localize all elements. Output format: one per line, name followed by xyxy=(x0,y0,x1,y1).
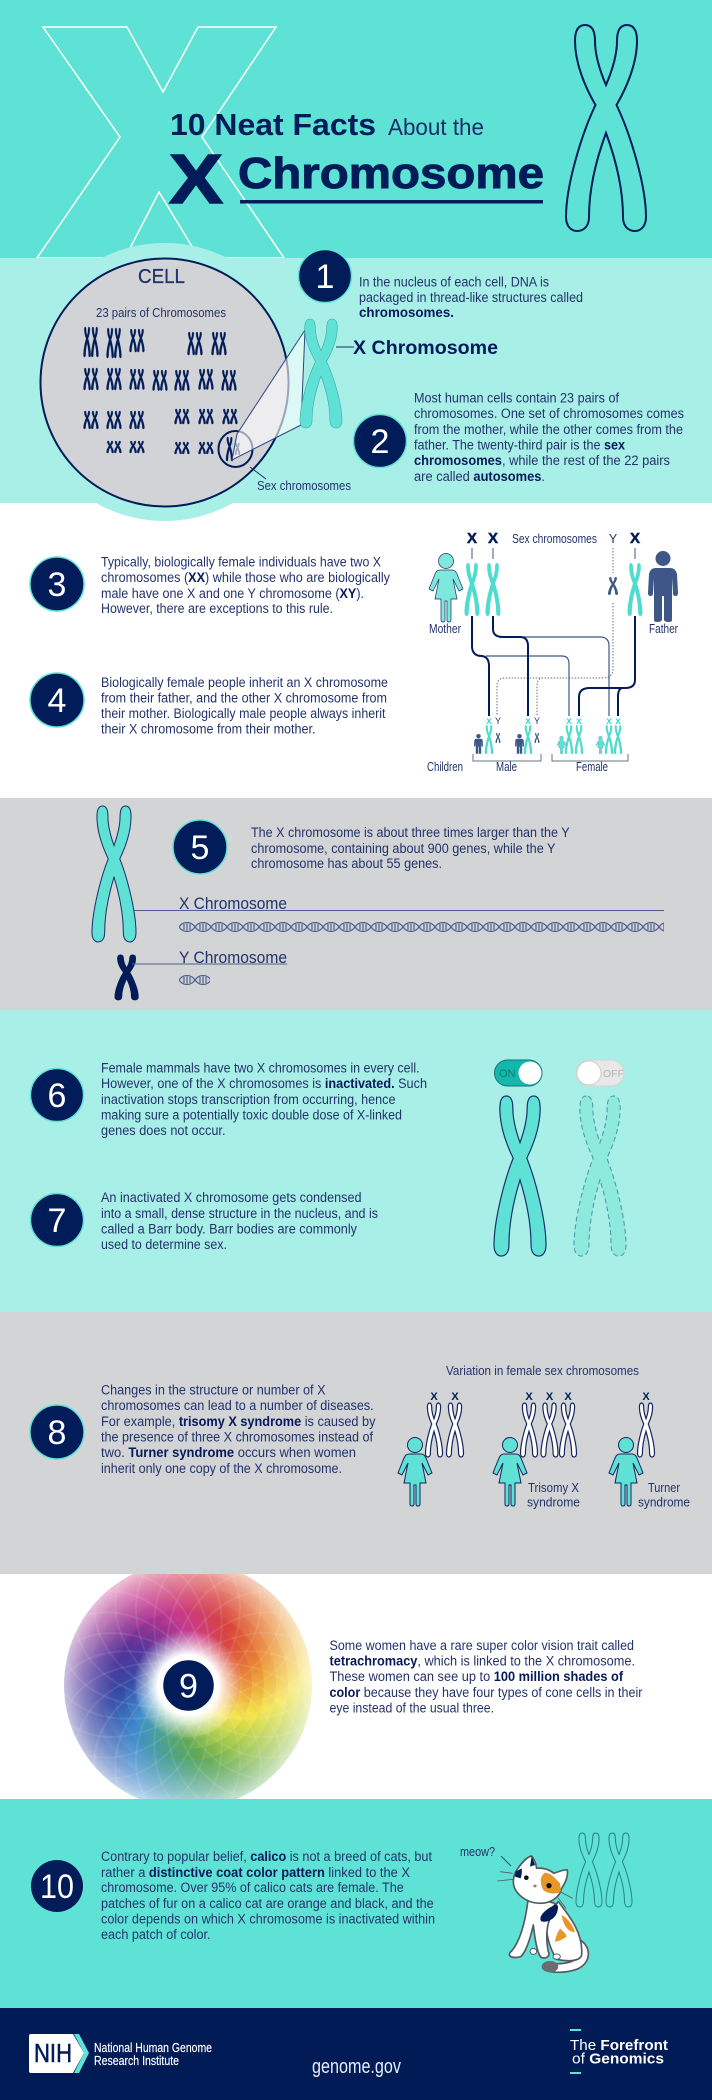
text block: fact 8: Changes in the structure or number of X xyxy=(101,1382,326,1398)
chart: variation in female sex chromosomes: X xyxy=(564,1391,572,1403)
text block: fact 9: These women can see up to 100 million shades of xyxy=(330,1669,624,1684)
text block: fact 7: An inactivated X chromosome gets condensed xyxy=(101,1190,362,1205)
text block: fact 6: Female mammals have two X chromosomes in every cell. xyxy=(101,1061,420,1076)
chart: inheritance diagram: Female xyxy=(576,760,608,774)
chart: inheritance diagram: Sex chromosomes xyxy=(512,532,597,546)
chromosome pairs xyxy=(84,327,240,461)
text block: fact 1: chromosomes. xyxy=(359,305,454,320)
number 6 xyxy=(30,1068,84,1122)
text block: fact 10: rather a distinctive coat color pattern linked to the X xyxy=(101,1865,410,1880)
text block: fact 9: Some women have a rare super color vision trait called xyxy=(330,1638,634,1653)
icon: XX chromosomes xyxy=(576,1833,632,1907)
text block: fact 6 xyxy=(101,1061,427,1138)
chart: inheritance diagram: Children xyxy=(427,760,463,774)
text block: fact 5 xyxy=(251,825,570,871)
panel: footer xyxy=(0,2008,712,2100)
text block: fact 3: However, there are exceptions to this rule. xyxy=(101,601,333,616)
number 2 xyxy=(354,414,406,468)
text block: fact 2: father. The twenty-third pair is the sex xyxy=(414,438,625,453)
text block: fact 7: into a small, dense structure in the nucleus, and is xyxy=(101,1206,378,1221)
icon: off switch xyxy=(576,1060,624,1086)
text block: fact 10: Contrary to popular belief, calico is not a breed of cats, but xyxy=(101,1849,432,1864)
chart: Y chromosome gene length: Y Chromosome xyxy=(179,948,287,967)
icon: inactive chromosome xyxy=(574,1096,626,1256)
title xyxy=(169,107,544,218)
panel: fact 10 xyxy=(0,1799,712,2008)
chart: variation in female sex chromosomes: X xyxy=(451,1391,459,1403)
chart: variation in female sex chromosomes xyxy=(398,1363,690,1510)
number 7: 7 xyxy=(48,1202,66,1240)
text block: fact 7: used to determine sex. xyxy=(101,1237,227,1252)
number 1: 1 xyxy=(316,258,334,296)
panel: fact 5 xyxy=(0,798,712,1010)
text block: fact 7: called a Barr body. Barr bodies are commonly xyxy=(101,1222,357,1236)
number 10 xyxy=(31,1860,83,1912)
text block: fact 9: tetrachromacy, which is linked to the X chromosome. xyxy=(330,1654,635,1669)
icon: outlined chromosome xyxy=(566,25,646,231)
title: Chromosome xyxy=(238,149,544,198)
chart: inheritance diagram: Y xyxy=(534,716,540,726)
label: meow xyxy=(460,1845,511,1866)
text block: fact 5: chromosome, containing about 900 genes, while the Y xyxy=(251,841,556,856)
number 3: 3 xyxy=(48,566,66,604)
logo: The Forefront of Genomics: The Forefront xyxy=(570,2037,668,2054)
text block: fact 8 xyxy=(101,1382,376,1476)
number 10: 10 xyxy=(40,1868,74,1906)
icon: calico cat xyxy=(497,1856,588,1972)
chart: inheritance diagram: Father xyxy=(649,622,678,636)
text block: fact 6: However, one of the X chromosomes is inactivated. Such xyxy=(101,1076,427,1091)
text block: fact 1: In the nucleus of each cell, DNA is xyxy=(359,275,549,290)
text block: fact 6: inactivation stops transcription from occurring, hence xyxy=(101,1092,396,1107)
icon: mother xyxy=(429,554,463,622)
text block: fact 8: the presence of three X chromosomes instead of xyxy=(101,1430,373,1444)
chart: variation in female sex chromosomes: X xyxy=(525,1391,533,1403)
text block: fact 3 xyxy=(101,555,390,616)
text block: fact 2: Most human cells contain 23 pairs of xyxy=(414,391,619,406)
panel: fact 8 xyxy=(0,1312,712,1574)
text block: fact 3: Typically, biologically female individuals have two X xyxy=(101,555,381,570)
chart: variation in female sex chromosomes: syndrome xyxy=(527,1496,580,1510)
text block: fact 8: two. Turner syndrome occurs when women xyxy=(101,1445,356,1460)
text block: fact 9 xyxy=(330,1638,643,1716)
chart: variation in female sex chromosomes: Variation in female sex chromosomes xyxy=(446,1363,639,1378)
number 1 xyxy=(298,250,352,302)
text block: fact 6: genes does not occur. xyxy=(101,1123,226,1138)
chart: variation in female sex chromosomes: Trisomy X xyxy=(528,1481,580,1495)
text block: fact 1 xyxy=(359,275,583,320)
icon: X chromosome xyxy=(92,806,136,942)
text block: fact 2 xyxy=(414,391,684,484)
text block: fact 3: male have one X and one Y chromosome (XY). xyxy=(101,586,364,601)
icon: on switch xyxy=(494,1060,542,1086)
text block: fact 10: color depends on which X chromosome is inactivated within xyxy=(101,1912,435,1927)
chart: inheritance diagram: Mother xyxy=(429,622,461,636)
chart: variation in female sex chromosomes: X xyxy=(546,1391,554,1403)
text block: fact 2: are called autosomes. xyxy=(414,469,545,484)
chart: inheritance diagram: X xyxy=(467,530,477,547)
title: X xyxy=(169,140,223,218)
number 6: 6 xyxy=(48,1077,66,1115)
chart: variation in female sex chromosomes: Turner xyxy=(648,1481,680,1495)
panel: fact 9 xyxy=(0,1574,712,1799)
chart: inheritance diagram: X xyxy=(630,530,640,547)
title: About the xyxy=(388,114,484,140)
label: X Chromosome: X Chromosome xyxy=(353,338,498,359)
chart: inheritance diagram: Y xyxy=(609,532,618,546)
number 3 xyxy=(30,557,84,611)
text block: fact 2: chromosomes. One set of chromosomes comes xyxy=(414,406,684,421)
chart: inheritance diagram: x xyxy=(606,716,612,727)
number 5 xyxy=(173,820,227,874)
chart: inheritance diagram: x xyxy=(615,716,621,727)
chart: inheritance diagram xyxy=(427,530,678,774)
chart: X chromosome gene length: X Chromosome xyxy=(179,894,287,913)
text block: fact 8: chromosomes can lead to a number of diseases. xyxy=(101,1398,374,1413)
icon: enlarged X chromosome xyxy=(300,319,342,428)
chart: variation in female sex chromosomes: X xyxy=(642,1391,650,1403)
panel: title header xyxy=(0,0,712,258)
panel: facts 3 and 4 xyxy=(0,503,712,798)
icon: active chromosome xyxy=(494,1096,546,1256)
website: genome.gov xyxy=(312,2056,401,2078)
number 8: 8 xyxy=(48,1414,66,1452)
chart: variation in female sex chromosomes: X xyxy=(430,1391,438,1403)
text block: fact 10 xyxy=(101,1849,435,1942)
icon: color wheel xyxy=(64,1574,312,1799)
text block: fact 7 xyxy=(101,1190,378,1252)
panel: facts 1 and 2 xyxy=(0,243,712,521)
text block: fact 5: The X chromosome is about three times larger than the Y xyxy=(251,825,570,840)
chart: variation in female sex chromosomes: syndrome xyxy=(638,1496,690,1510)
chart: Y chromosome gene length xyxy=(132,948,287,985)
text block: fact 9: color because they have four types of cone cells in their xyxy=(330,1685,643,1700)
text block: fact 6: making sure a potentially toxic double dose of X-linked xyxy=(101,1108,402,1123)
cell diagram xyxy=(26,243,305,521)
label: sex chromosomes: Sex chromosomes xyxy=(257,479,351,493)
icon: off switch: OFF xyxy=(603,1068,624,1080)
chart: inheritance diagram: x xyxy=(566,716,572,727)
text block: fact 3: chromosomes (XX) while those who are biologically xyxy=(101,570,390,585)
title: 10 Neat Facts xyxy=(170,107,376,142)
text block: fact 2: chromosomes, while the rest of the 22 pairs xyxy=(414,453,670,468)
panel: facts 6 and 7 xyxy=(0,1010,712,1312)
logo: NIH: NIH xyxy=(34,2038,72,2068)
chart: inheritance diagram: x xyxy=(525,716,531,727)
logo: NIH: National Human Genome xyxy=(94,2041,212,2055)
icon: on switch: ON xyxy=(499,1068,516,1080)
icon: Y chromosome xyxy=(115,955,138,1000)
number 9: 9 xyxy=(179,1668,198,1706)
text block: fact 4: their X chromosome from their mother. xyxy=(101,722,316,737)
logo: NIH: Research Institute xyxy=(94,2054,179,2068)
text block: fact 9: eye instead of the usual three. xyxy=(330,1700,494,1716)
text block: fact 4: Biologically female people inherit an X chromosome xyxy=(101,675,388,690)
logo: NIH xyxy=(29,2034,212,2073)
logo: The Forefront of Genomics xyxy=(570,2029,668,2074)
cell diagram: 23 pairs of Chromosomes xyxy=(96,305,226,320)
chart: inheritance diagram: X xyxy=(488,530,498,547)
number 4: 4 xyxy=(48,682,66,720)
text block: fact 8: For example, trisomy X syndrome is caused by xyxy=(101,1414,376,1429)
text block: fact 10: chromosome. Over 95% of calico cats are female. The xyxy=(101,1880,404,1895)
chart: inheritance diagram: Y xyxy=(495,716,501,726)
text block: fact 1: packaged in thread-like structures called xyxy=(359,290,583,305)
icon: father xyxy=(648,551,678,622)
text block: fact 4: from their father, and the other X chromosome from xyxy=(101,691,387,706)
text block: fact 10: patches of fur on a calico cat are orange and black, and the xyxy=(101,1896,434,1911)
text block: fact 5: chromosome has about 55 genes. xyxy=(251,856,442,871)
number 2: 2 xyxy=(371,423,389,461)
label: meow: meow? xyxy=(460,1845,495,1859)
text block: fact 10: each patch of color. xyxy=(101,1927,210,1942)
chart: inheritance diagram: Male xyxy=(496,760,517,774)
chart: inheritance diagram: x xyxy=(486,716,492,727)
number 5: 5 xyxy=(191,829,209,867)
text block: fact 8: inherit only one copy of the X chromosome. xyxy=(101,1461,342,1476)
chart: X chromosome gene length xyxy=(134,894,664,932)
number 8 xyxy=(30,1405,84,1459)
text block: fact 4 xyxy=(101,675,388,737)
number 9 xyxy=(162,1660,214,1712)
text block: fact 2: from the mother, while the other comes from the xyxy=(414,422,683,437)
chart: inheritance diagram: x xyxy=(576,716,582,727)
logo: The Forefront of Genomics: of Genomics xyxy=(572,2050,664,2068)
large outlined X xyxy=(37,27,284,258)
text block: fact 4: their mother. Biologically male people always inherit xyxy=(101,706,386,721)
cell diagram: CELL xyxy=(138,266,185,288)
number 4 xyxy=(30,673,84,727)
number 7 xyxy=(30,1194,84,1246)
